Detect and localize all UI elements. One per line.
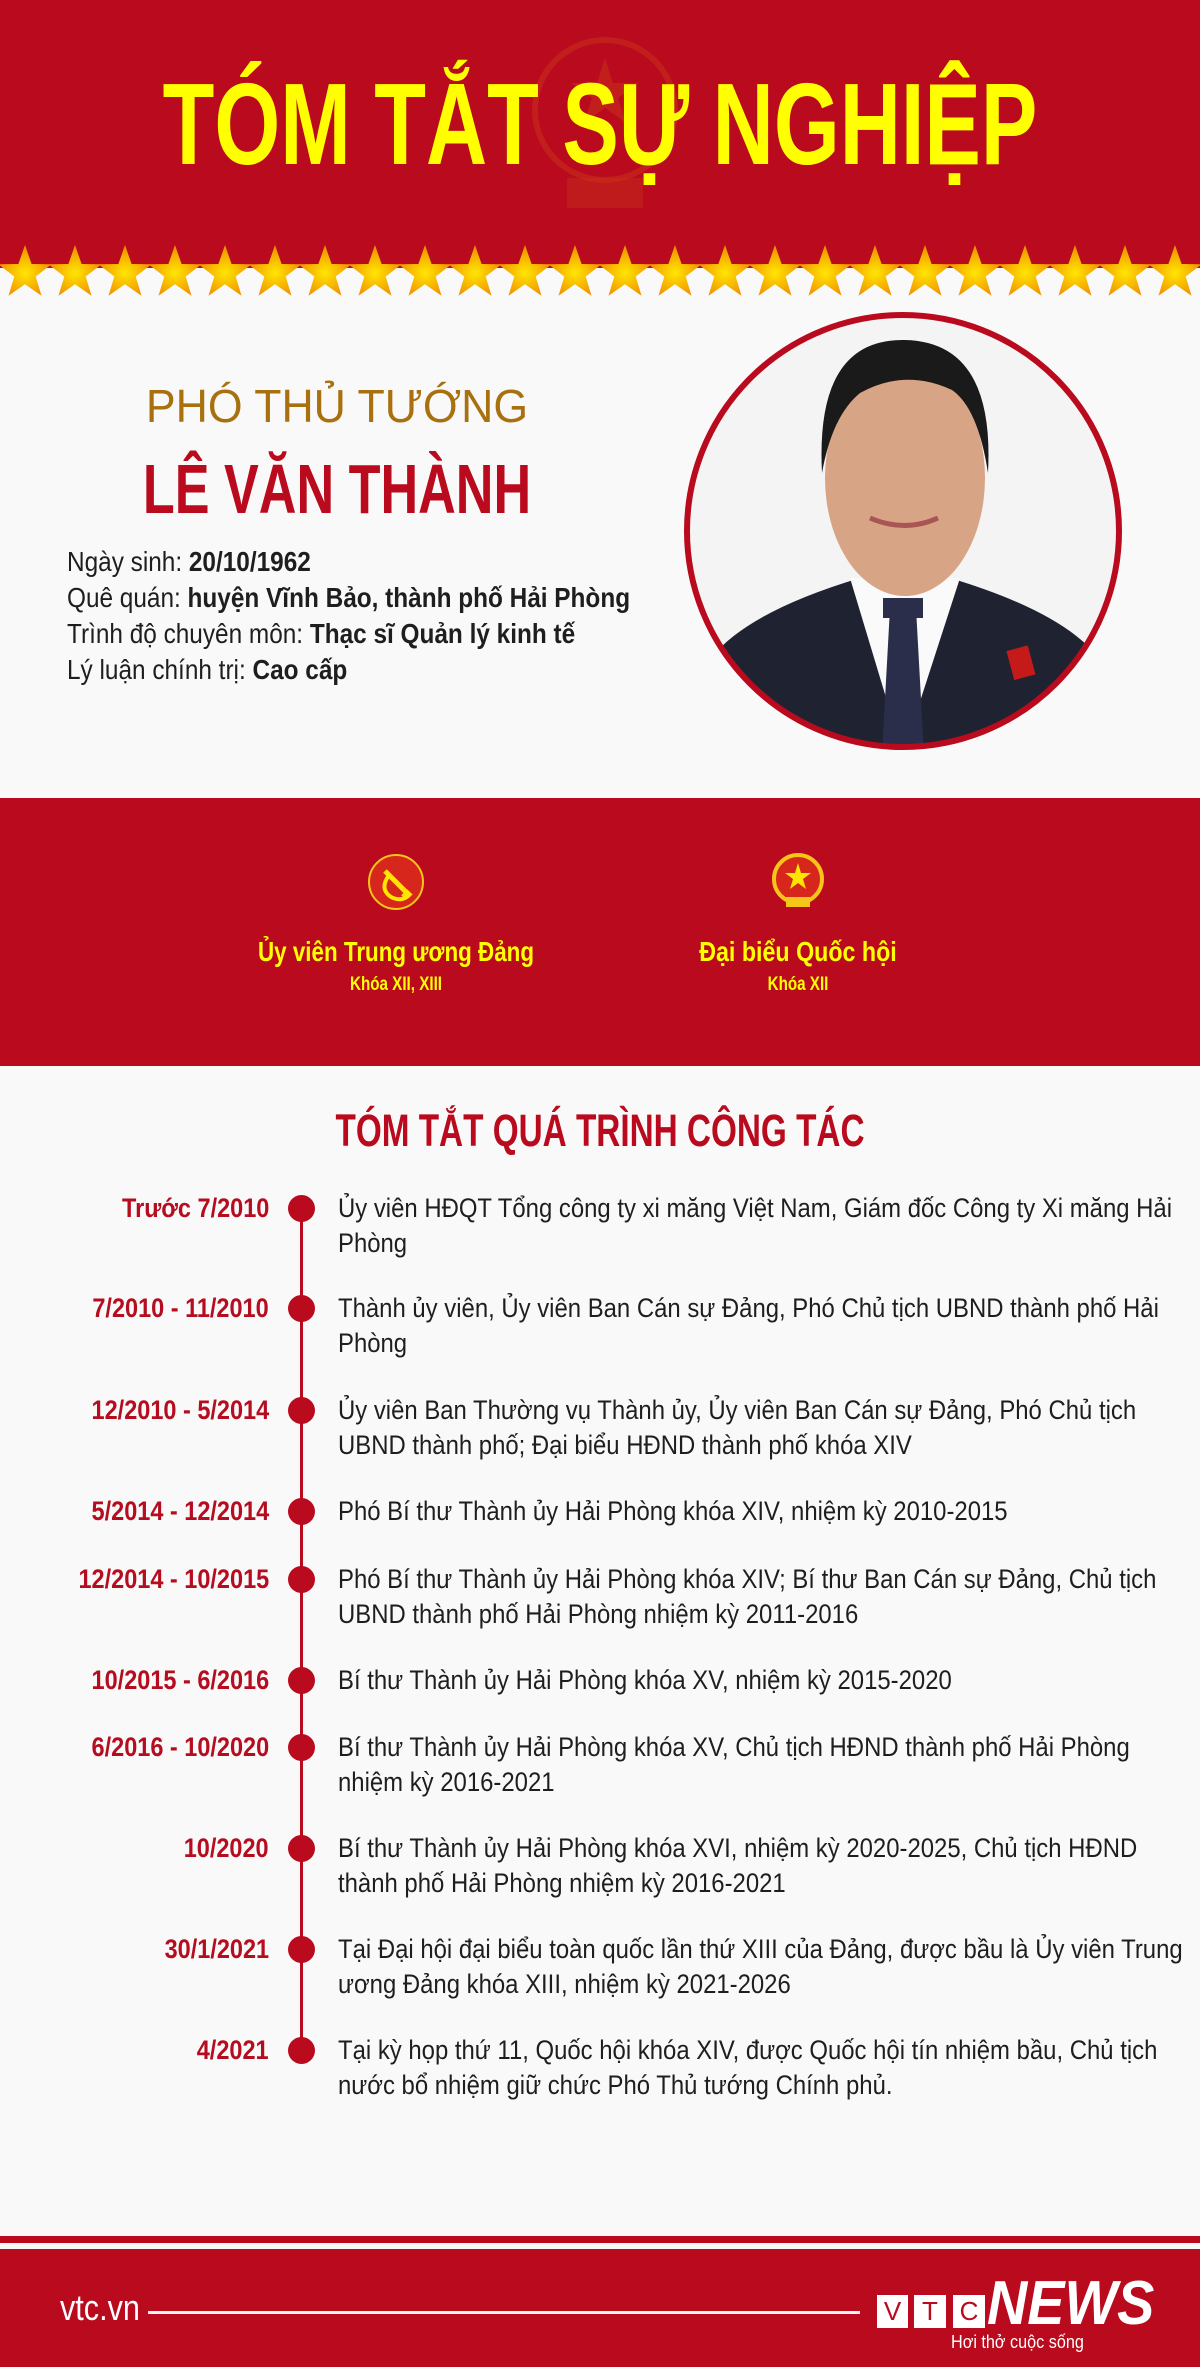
entry 2: [93, 1293, 1159, 1358]
logo: VTC NEWS: [877, 2269, 1154, 2352]
footer: [0, 2236, 1200, 2367]
entry 2: 7/2010 - 11/2010: [93, 1293, 269, 1323]
entry 10: 4/2021: [197, 2035, 269, 2065]
logo: VTC NEWS: NEWS: [987, 2269, 1154, 2338]
entry 5: [78, 1564, 1156, 1629]
entry 2: Thành ủy viên, Ủy viên Ban Cán sự Đảng, Phó Chủ tịch UBND thành phố Hải: [338, 1293, 1159, 1323]
entry 9: ương Đảng khóa XIII, nhiệm kỳ 2021-2026: [338, 1969, 791, 1999]
entry 5: 12/2014 - 10/2015: [78, 1564, 269, 1594]
section heading: TÓM TẮT QUÁ TRÌNH CÔNG TÁC: [335, 1105, 865, 1156]
entry 6: 10/2015 - 6/2016: [91, 1665, 269, 1695]
entry 1: Phòng: [338, 1228, 407, 1258]
entry 1: Trước 7/2010: [122, 1193, 269, 1223]
portrait photo: [684, 312, 1122, 750]
entry 3: 12/2010 - 5/2014: [91, 1395, 269, 1425]
role heading: PHÓ THỦ TƯỚNG: [146, 380, 528, 432]
logo: VTC NEWS: T: [922, 2296, 938, 2326]
entry 6: Bí thư Thành ủy Hải Phòng khóa XV, nhiệm kỳ 2015-2020: [338, 1665, 952, 1695]
entry 7: nhiệm kỳ 2016-2021: [338, 1767, 555, 1797]
logo: VTC NEWS: Hơi thở cuộc sống: [951, 2332, 1084, 2352]
entry 9: [164, 1934, 1183, 1999]
sub: party terms: Khóa XII, XIII: [350, 974, 442, 995]
timeline: [78, 1193, 1183, 2100]
entry 3: UBND thành phố; Đại biểu HĐND thành phố khóa XIV: [338, 1430, 912, 1460]
sub: assembly term: Khóa XII: [768, 974, 828, 995]
entry 4: Phó Bí thư Thành ủy Hải Phòng khóa XIV, nhiệm kỳ 2010-2015: [338, 1496, 1008, 1526]
entry 8: 10/2020: [184, 1833, 269, 1863]
entry 8: thành phố Hải Phòng nhiệm kỳ 2016-2021: [338, 1868, 786, 1898]
logo: VTC NEWS: V: [884, 2296, 901, 2326]
entry 5: UBND thành phố Hải Phòng nhiệm kỳ 2011-2016: [338, 1599, 858, 1629]
entry 4: 5/2014 - 12/2014: [91, 1496, 269, 1526]
personal details: Quê quán: huyện Vĩnh Bảo, thành phố Hải Phòng: [67, 582, 630, 613]
entry 7: [91, 1732, 1130, 1797]
entry 2: Phòng: [338, 1328, 407, 1358]
entry 1: [122, 1193, 1172, 1258]
personal details: Ngày sinh: 20/10/1962: [67, 546, 311, 577]
label: National Assembly deputy: Đại biểu Quốc hội: [699, 936, 897, 967]
red band: positions: [0, 798, 1200, 1066]
entry 7: 6/2016 - 10/2020: [91, 1732, 269, 1762]
entry 1: Ủy viên HĐQT Tổng công ty xi măng Việt Nam, Giám đốc Công ty Xi măng Hải: [338, 1193, 1172, 1223]
entry 8: [184, 1833, 1137, 1898]
label: party CC member: Ủy viên Trung ương Đảng: [258, 936, 534, 967]
entry 7: Bí thư Thành ủy Hải Phòng khóa XV, Chủ tịch HĐND thành phố Hải Phòng: [338, 1732, 1130, 1762]
personal details: Lý luận chính trị: Cao cấp: [67, 654, 347, 685]
stars row: [0, 245, 1200, 296]
personal details: [67, 546, 630, 685]
logo: VTC NEWS: C: [960, 2296, 978, 2326]
entry 3: [91, 1395, 1136, 1460]
entry 3: Ủy viên Ban Thường vụ Thành ủy, Ủy viên Ban Cán sự Đảng, Phó Chủ tịch: [338, 1395, 1136, 1425]
icon: party emblem: [368, 854, 424, 910]
entry 9: 30/1/2021: [164, 1934, 269, 1964]
icon: national emblem: [772, 853, 824, 907]
entry 10: Tại kỳ họp thứ 11, Quốc hội khóa XIV, được Quốc hội tín nhiệm bầu, Chủ tịch: [338, 2035, 1157, 2065]
entry 10: nước bổ nhiệm giữ chức Phó Thủ tướng Chính phủ.: [338, 2070, 893, 2100]
entry 8: Bí thư Thành ủy Hải Phòng khóa XVI, nhiệm kỳ 2020-2025, Chủ tịch HĐND: [338, 1833, 1137, 1863]
entry 9: Tại Đại hội đại biểu toàn quốc lần thứ XIII của Đảng, được bầu là Ủy viên Trung: [338, 1934, 1183, 1964]
header band: [0, 0, 1200, 268]
title: TÓM TẮT SỰ NGHIỆP: [163, 59, 1037, 189]
site url: vtc.vn: [60, 2287, 140, 2328]
personal details: Trình độ chuyên môn: Thạc sĩ Quản lý kinh tế: [67, 618, 575, 649]
entry 10: [197, 2035, 1157, 2100]
faint emblem: [532, 37, 678, 208]
name heading: LÊ VĂN THÀNH: [143, 450, 531, 528]
entry 5: Phó Bí thư Thành ủy Hải Phòng khóa XIV; Bí thư Ban Cán sự Đảng, Chủ tịch: [338, 1564, 1156, 1594]
